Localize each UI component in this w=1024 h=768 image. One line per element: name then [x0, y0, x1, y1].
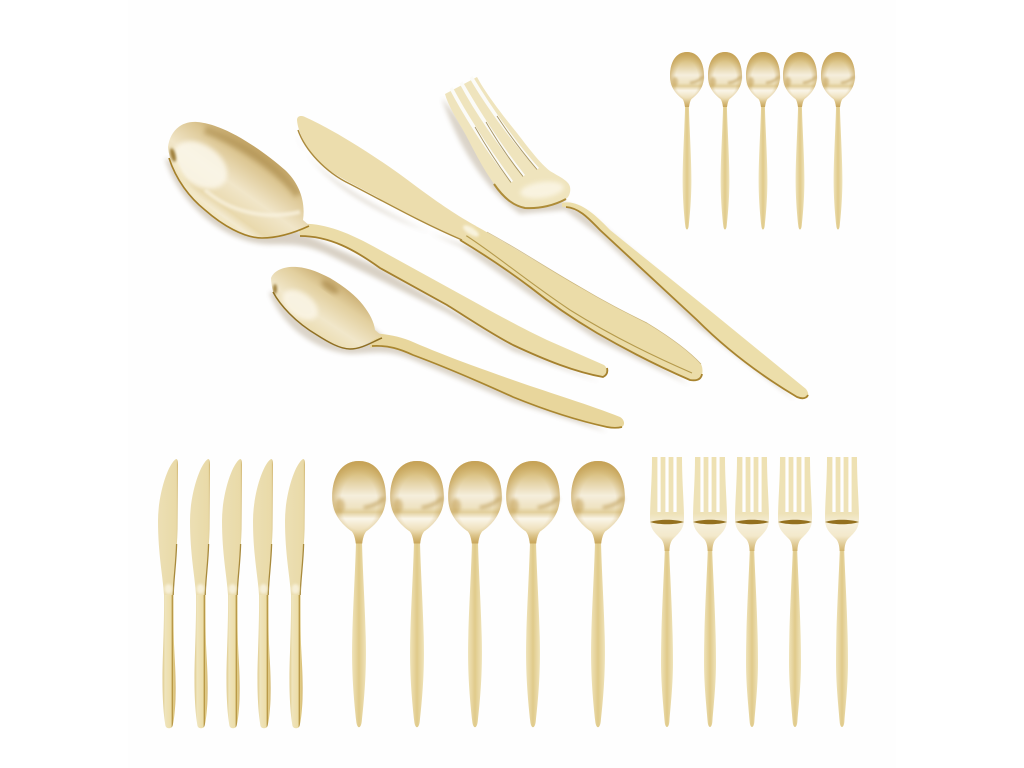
row of table knives, bottom left	[158, 459, 305, 728]
large dinner fork	[442, 76, 808, 400]
infographic: gold cutlery set	[158, 52, 859, 728]
large serving spoon	[160, 115, 607, 382]
fork slots	[450, 76, 539, 182]
large dinner knife	[296, 116, 702, 385]
dessert spoon	[265, 260, 624, 432]
row of table forks, bottom right	[650, 457, 859, 727]
row of table spoons, bottom centre	[332, 461, 625, 727]
row of coffee spoons, top right	[670, 52, 855, 230]
